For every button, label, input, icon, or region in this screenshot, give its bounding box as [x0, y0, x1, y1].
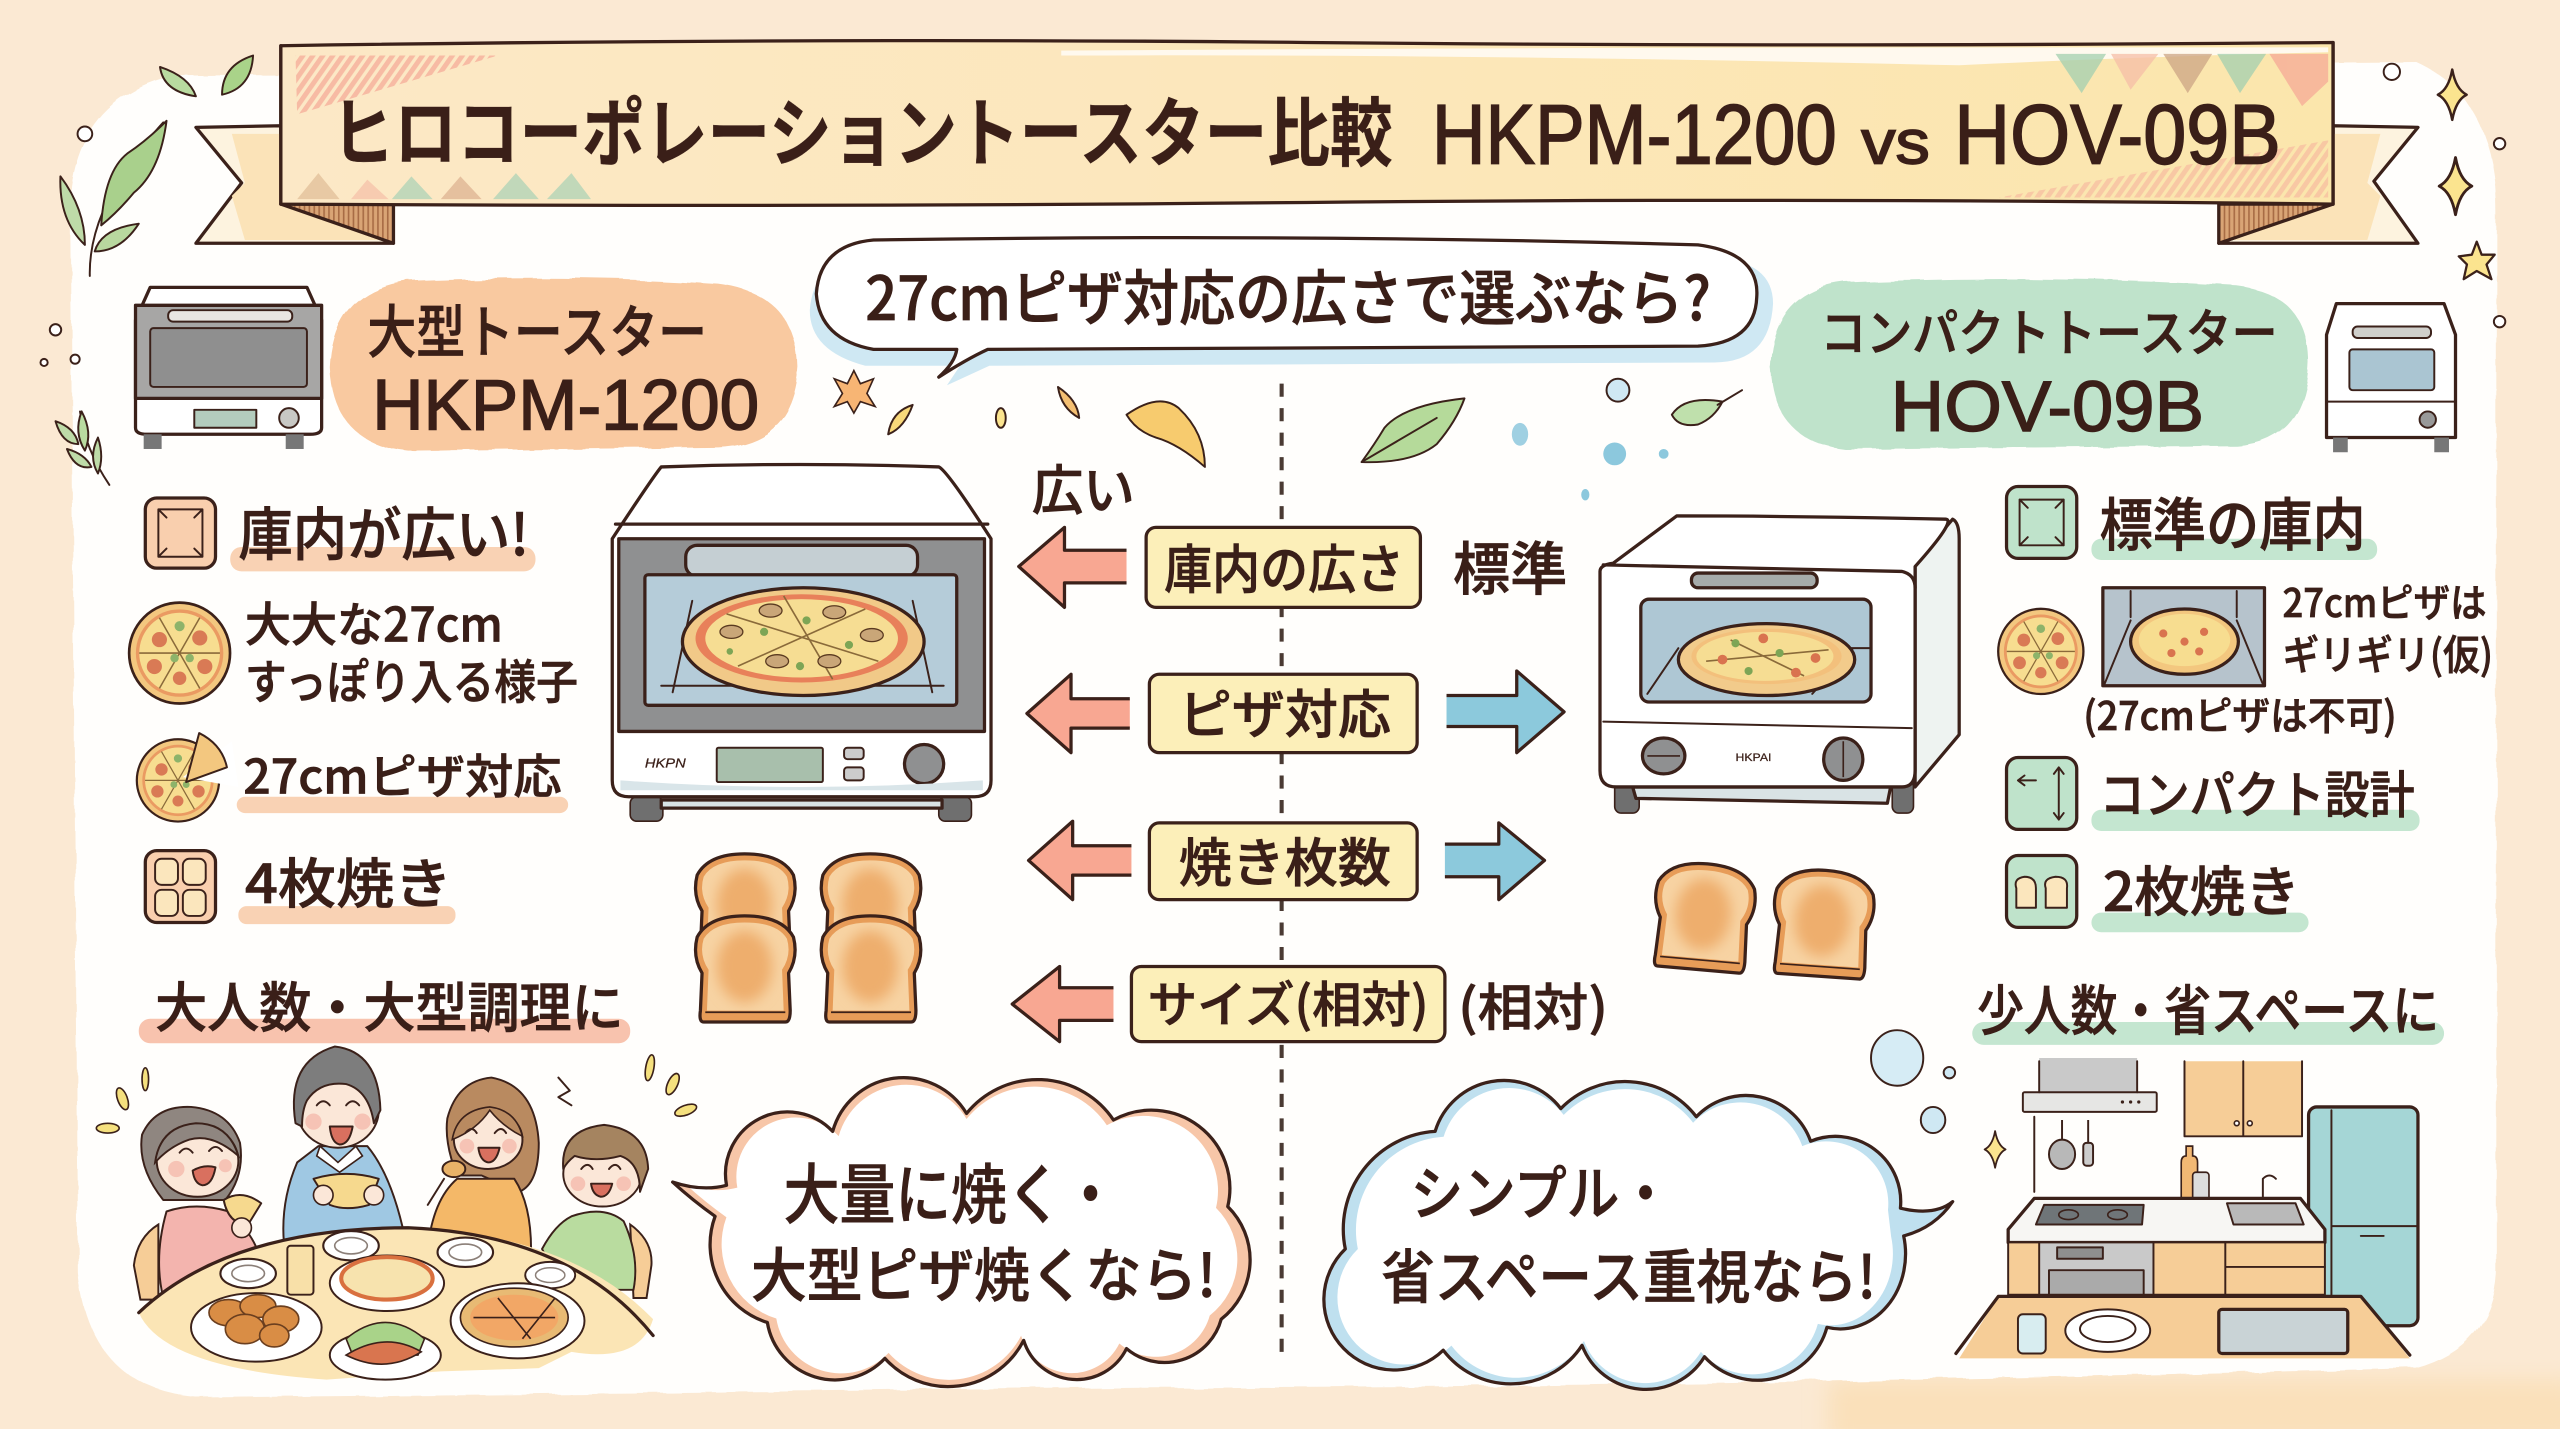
comparison row: slices: [1029, 821, 1544, 900]
pill: large toaster name: 大型トースター: [367, 288, 707, 370]
feature: 2 slices: 2枚焼き: [2103, 849, 2300, 927]
counter and stove: [2008, 1146, 2325, 1295]
title text: ヒロコーポレーショントースター比較: [331, 73, 1393, 182]
pill: compact toaster name: HOV-09B: [1891, 367, 2204, 447]
arrow: left pink: [1019, 527, 1127, 607]
title text: vs: [1861, 108, 1930, 177]
banner ribbon right tail: [2219, 126, 2418, 243]
arrow: left pink: [1012, 967, 1113, 1042]
arrow: right blue: [1447, 671, 1564, 753]
range hood: [2023, 1058, 2157, 1192]
oven brand text: HKPN: [645, 755, 686, 770]
pill: compact toaster name: [1770, 279, 2309, 449]
pill: large toaster name: HKPM-1200: [372, 365, 759, 445]
right feature list: [1998, 480, 2493, 932]
thought bubbles and sparkle: [1871, 1030, 2006, 1168]
feature: compact design: [2007, 754, 2420, 831]
banner ribbon left tail: [196, 126, 393, 243]
thought cloud: compact toaster: 省スペース重視なら!: [1381, 1230, 1876, 1315]
feature: 27cm pizza fits: すっぽり入る様子: [245, 644, 578, 713]
dishes: [191, 1231, 584, 1380]
feature: 4 slices: 4枚焼き: [245, 841, 452, 919]
pill: large toaster name: [330, 278, 798, 451]
fridge: [2309, 1107, 2418, 1326]
person: boy: [542, 1125, 648, 1290]
title text: HKPM-1200: [1432, 86, 1837, 181]
person: grandmother: [141, 1107, 261, 1300]
feature: pizza barely fits: ギリギリ(仮): [2282, 622, 2493, 681]
comparison row: slices: 焼き枚数: [1179, 822, 1391, 898]
comparison row: pizza: ピザ対応: [1179, 673, 1391, 749]
family dining illustration: [96, 1047, 698, 1380]
arrow: left pink: [1027, 674, 1130, 753]
kitchen illustration: [1956, 1058, 2418, 1358]
center dashed divider: [1280, 384, 1283, 1355]
feature: pizza barely fits: 27cmピザは: [2282, 573, 2487, 629]
person: mother: [428, 1078, 571, 1265]
decoration: green leaves and water drops: [1362, 379, 1742, 500]
thought cloud: large toaster: 大型ピザ焼くなら!: [751, 1228, 1216, 1313]
person: father: [283, 1047, 405, 1257]
question speech bubble: 27cmピザ対応の広さで選ぶなら?: [865, 251, 1711, 338]
feature: standard interior: 標準の庫内: [2100, 480, 2366, 562]
feature: pizza barely fits: [1998, 573, 2493, 742]
question speech bubble: [810, 238, 1773, 385]
comparison row: interior width: 広い: [1032, 447, 1135, 525]
heading: small households: 少人数・省スペースに: [1977, 968, 2439, 1046]
title banner: [281, 41, 2333, 205]
feature: 27cm pizza: [137, 733, 568, 822]
oven brand text: HKPAI: [1736, 752, 1771, 764]
feature: pizza barely fits: (27cmピザは不可): [2083, 686, 2397, 742]
thought cloud: compact toaster: シンプル・: [1411, 1147, 1672, 1232]
comparison row: interior width: 標準: [1453, 524, 1567, 606]
sparkle dashes: [96, 1054, 698, 1133]
toast: two slices: [1650, 860, 1876, 980]
title text: HOV-09B: [1954, 86, 2281, 181]
chairs: [134, 1224, 652, 1300]
wall cabinet: [2184, 1061, 2302, 1136]
toast: four slices: [696, 854, 921, 1022]
feature: 27cm pizza fits: 大大な27cm: [245, 587, 503, 656]
decoration: left leaves: [40, 56, 253, 485]
feature: 2 slices: [2007, 849, 2309, 932]
left feature list: [129, 490, 578, 924]
pill: compact toaster name: コンパクトトースター: [1820, 292, 2278, 366]
thought cloud: compact toaster: [1324, 1080, 1953, 1389]
feature: spacious interior: 庫内が広い!: [238, 490, 529, 572]
comparison row: interior width: 庫内の広さ: [1164, 528, 1404, 604]
comparison row: interior width: [1019, 447, 1567, 607]
table: [139, 1228, 653, 1380]
arrow: left pink: [1029, 821, 1131, 900]
arrow: right blue: [1445, 823, 1544, 900]
large toaster illustration with pizza: [612, 464, 991, 821]
title text: [331, 73, 2281, 182]
thought cloud: large toaster: [673, 1078, 1250, 1387]
heading: large groups: 大人数・大型調理に: [155, 965, 624, 1043]
small icon: compact toaster: [2327, 304, 2456, 452]
feature: 27cm pizza fits: [129, 587, 578, 713]
decoration: autumn leaves and flower: [834, 371, 1205, 467]
hanging utensils: [2049, 1120, 2093, 1169]
comparison row: size: (相対): [1458, 966, 1608, 1040]
decoration: right sparkles and star: [2384, 64, 2505, 327]
dining counter: [1956, 1296, 2410, 1358]
thought cloud: large toaster: 大量に焼く・: [784, 1142, 1118, 1237]
comparison row: size: サイズ(相対): [1148, 966, 1429, 1037]
small icon: large toaster: [136, 287, 322, 449]
comparison row: size: [1012, 966, 1608, 1042]
compact toaster illustration with pizza: [1600, 516, 1959, 813]
feature: 4 slices: [145, 841, 456, 924]
feature: compact design: コンパクト設計: [2100, 754, 2415, 828]
comparison row: pizza: [1027, 671, 1564, 753]
feature: 27cm pizza: 27cmピザ対応: [243, 738, 562, 807]
